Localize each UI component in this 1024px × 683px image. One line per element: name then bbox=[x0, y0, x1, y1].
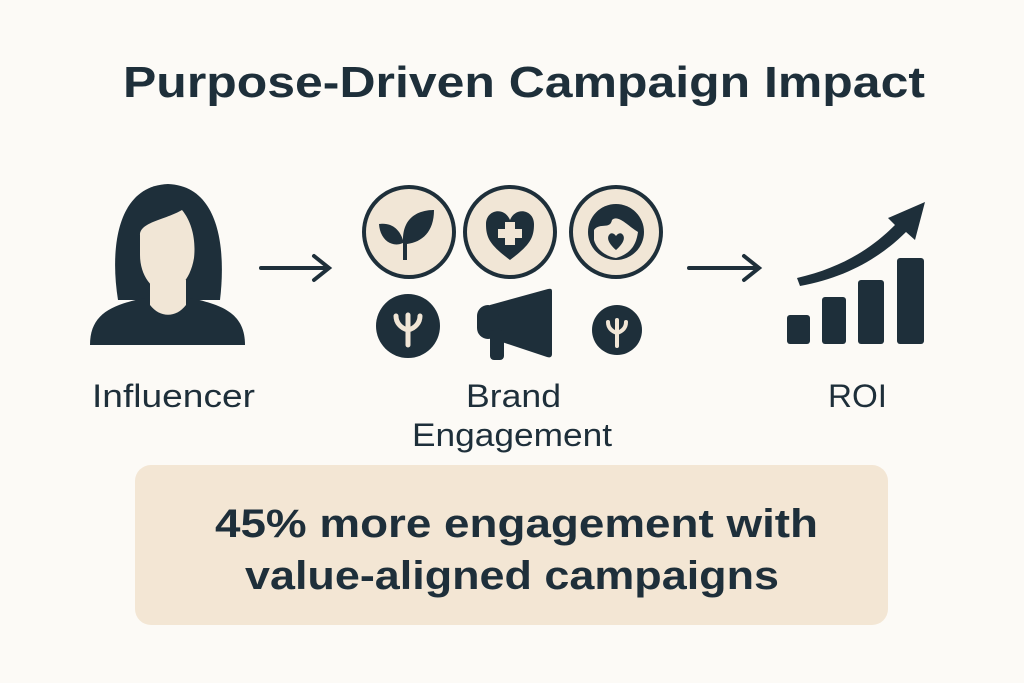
callout box: 45% more engagement with bbox=[215, 502, 818, 546]
callout box: value-aligned campaigns bbox=[245, 554, 779, 598]
icon: small sprout left bbox=[376, 294, 440, 358]
icon: megaphone bbox=[477, 289, 552, 360]
icon: heart circle bbox=[465, 187, 555, 277]
arrow 2 bbox=[689, 256, 759, 280]
arrow 1 bbox=[261, 256, 329, 280]
callout box bbox=[135, 465, 888, 625]
label: brand engagement: Engagement bbox=[412, 417, 612, 453]
icon: leaf circle bbox=[364, 187, 454, 277]
icon: ROI chart bbox=[787, 202, 925, 344]
label: influencer: Influencer bbox=[92, 378, 255, 414]
icon: globe circle bbox=[571, 187, 661, 277]
label: brand engagement: Brand bbox=[466, 378, 561, 414]
icon: influencer person bbox=[90, 184, 245, 345]
label: ROI: ROI bbox=[828, 378, 887, 414]
label: brand engagement bbox=[412, 378, 612, 453]
icon: small sprout right bbox=[592, 305, 642, 355]
title: Purpose-Driven Campaign Impact bbox=[123, 58, 925, 107]
